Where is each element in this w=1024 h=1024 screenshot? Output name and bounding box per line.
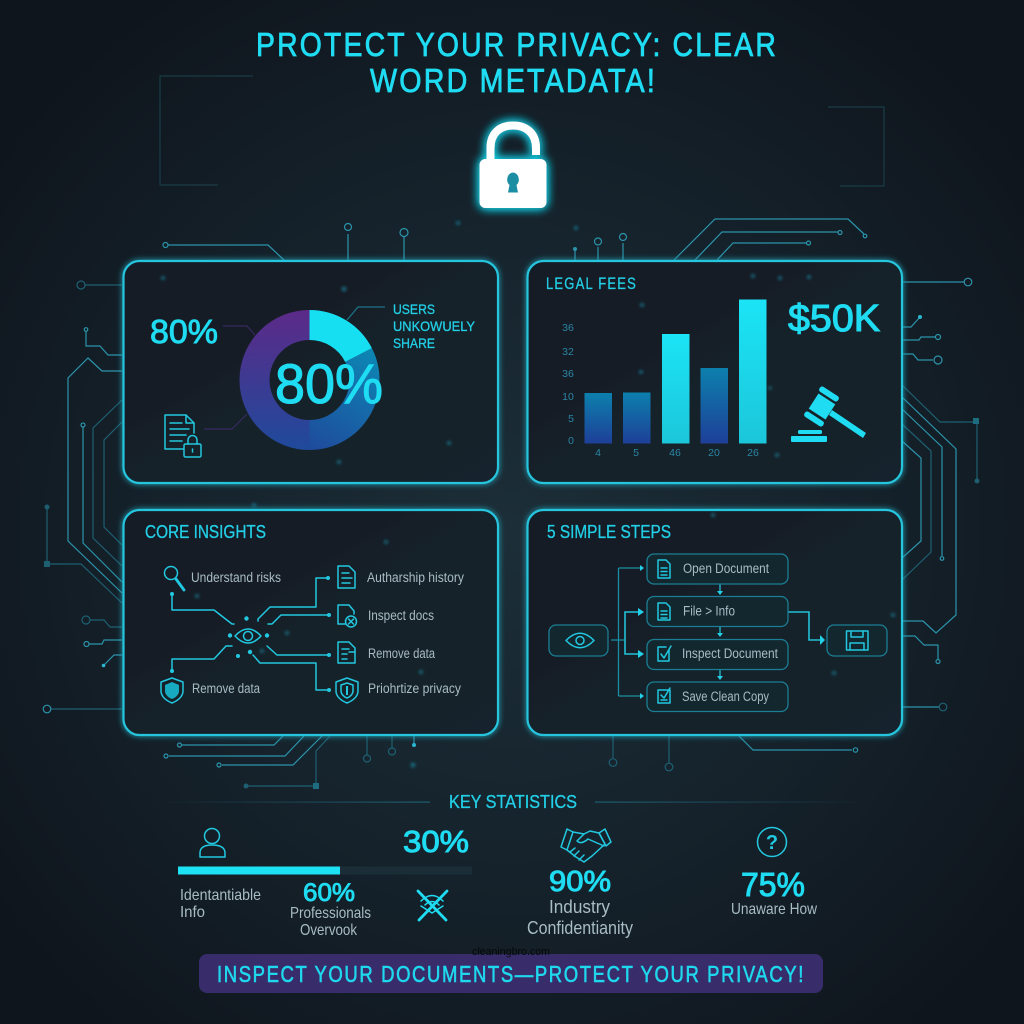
bar chart: 36 [562,322,574,334]
stat: identifiable info [178,824,472,921]
insight labels: Inspect docs [368,608,434,623]
icon: inspect document [338,605,356,627]
icon: gavel [791,385,866,442]
circuit traces: top [163,219,867,260]
bar chart: 20 [708,447,720,459]
title [256,26,778,99]
title: PROTECT YOUR PRIVACY: CLEAR [256,26,778,63]
icon: shield right [336,678,358,703]
title: WORD METADATA! [370,62,657,99]
step: save clean copy: Save Clean Copy [682,689,769,704]
panel: 5 simple steps [528,510,902,735]
step: file info: File > Info [683,604,735,618]
call to action banner [199,954,823,993]
call to action banner: INSPECT YOUR DOCUMENTS—PROTECT YOUR PRIVACY! [217,961,805,987]
icon: magnifier [164,566,184,590]
panel frame [124,261,498,483]
label [180,887,261,921]
donut label: UNKOWUELY [393,318,476,334]
icon: padlock [480,126,546,208]
bar chart: 46 [669,447,681,459]
icon: locked document [165,415,201,457]
left stat: 80% [150,313,218,350]
panel frame [528,510,902,735]
step: open document [647,554,788,584]
circuit traces: right [902,278,980,711]
panel: legal fees [528,261,902,483]
label: Identantiable [180,887,261,904]
insight labels: Autharship history [367,570,464,585]
icon: crossed signal [418,891,447,920]
donut leader lines [204,307,385,429]
bar chart: 32 [562,346,574,358]
icon: person [200,828,225,857]
glowing particles [161,221,895,767]
value: 30% [403,824,469,859]
bar chart: 26 [747,447,759,459]
panel frame [124,510,498,735]
insight labels: Understand risks [191,570,281,585]
stat: professionals overlook: 60% [303,879,355,907]
icon: shield left [161,678,183,703]
icon: save box [827,625,887,656]
step: save clean copy [647,682,788,712]
icon: authorship document [338,566,355,588]
stat: industry confidentiality [527,829,633,938]
icon: handshake [561,829,611,862]
icon: eye start box [549,625,608,656]
donut label: USERS [393,301,435,317]
step: inspect document: Inspect Document [682,646,778,661]
circuit traces: bottom [164,736,858,789]
donut label: SHARE [393,335,435,351]
step: inspect document [647,640,788,670]
stat: professionals overlook: Professionals [290,905,371,922]
bar chart: 4 [595,447,601,459]
icon: central eye with connectors [170,576,331,692]
insight labels: Remove data [368,646,435,661]
bar chart [562,300,766,459]
stat: industry confidentiality: Industry [549,897,610,917]
key statistics heading: KEY STATISTICS [449,792,577,812]
watermark: cleaningbro.com [472,946,550,958]
stat: unaware how: Unaware How [731,901,817,918]
flow connectors [611,565,825,699]
insight labels: Priohrtize privacy [368,681,461,696]
fee value: $50K [788,298,880,340]
icon: question mark: ? [766,832,778,854]
bar chart: 10 [562,391,574,403]
insight labels [191,570,464,696]
stat: industry confidentiality: Confidentianity [527,918,633,938]
label: Info [180,904,205,921]
circuit traces: left [43,281,122,713]
panel: users metadata share [124,261,498,483]
progress bar [178,866,472,874]
icon: remove data document [338,642,355,663]
heading: CORE INSIGHTS [145,522,266,542]
bar chart: 36 [562,368,574,380]
stat: professionals overlook [290,879,447,939]
heading: 5 SIMPLE STEPS [547,522,671,542]
step: file info [647,596,788,626]
bar chart: 0 [568,435,574,447]
stat: unaware how: 75% [741,866,805,903]
donut label [393,301,476,351]
insight labels: Remove data [192,681,260,696]
stat: unaware how [731,828,817,918]
heading: LEGAL FEES [546,275,637,293]
panel: core insights [124,510,498,735]
decorative corner brackets [160,76,884,186]
panel frame [528,261,902,483]
donut center value: 80% [275,352,383,415]
donut chart [254,325,365,435]
step: open document: Open Document [683,561,769,576]
stat: industry confidentiality: 90% [549,866,611,898]
bar chart: 5 [568,413,574,425]
stat: professionals overlook: Overvook [300,922,358,939]
bar chart: 5 [633,447,639,459]
